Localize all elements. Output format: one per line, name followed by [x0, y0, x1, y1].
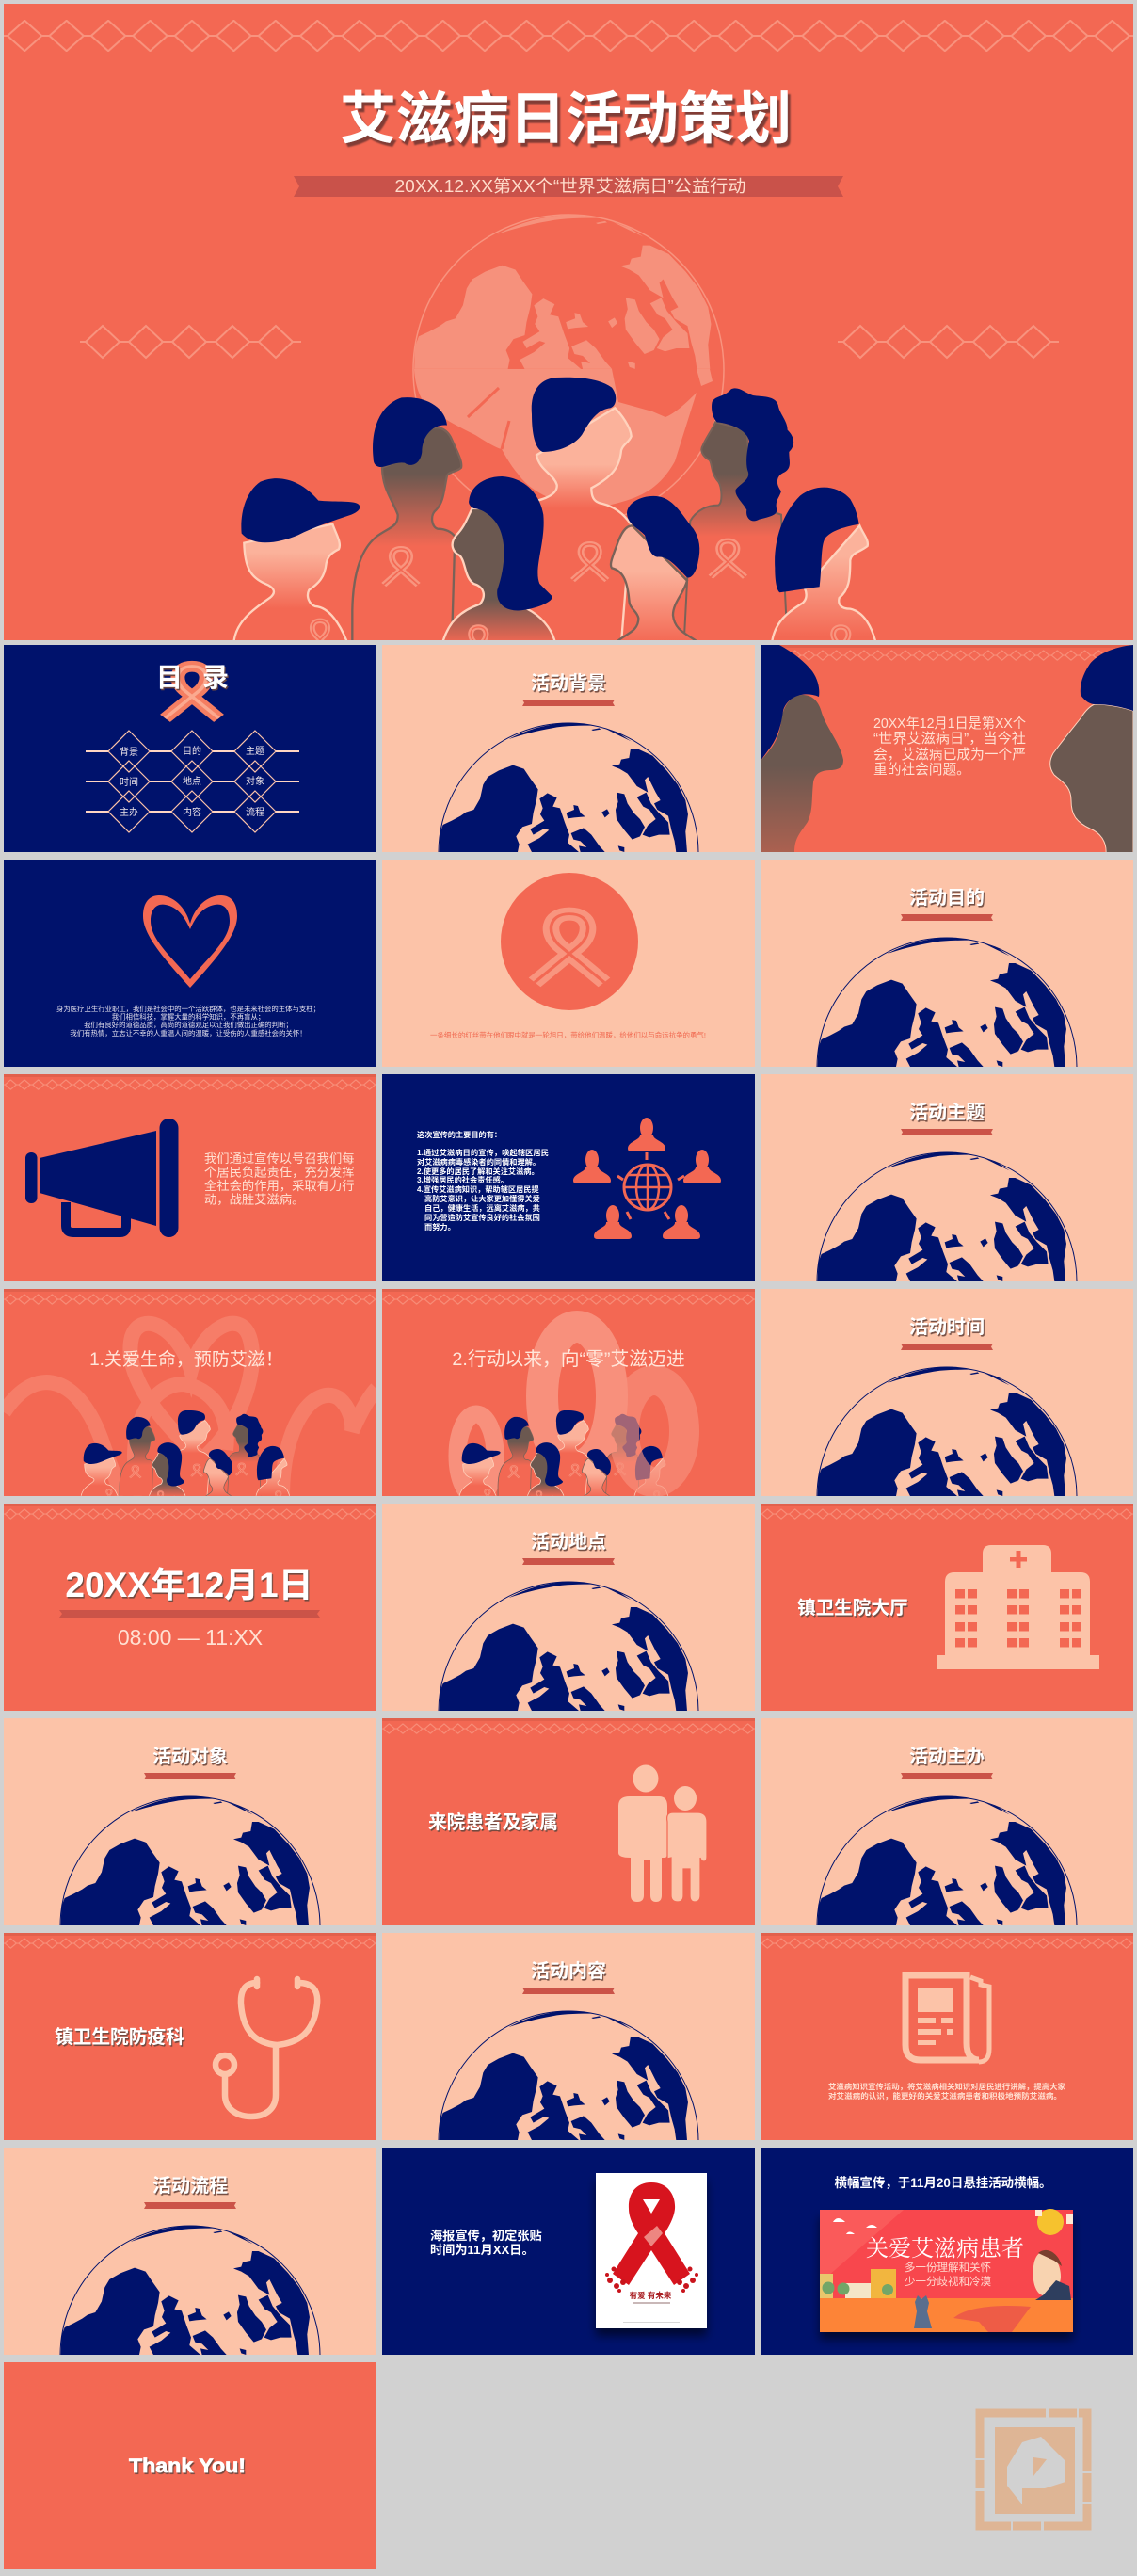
date heading: 20XX年12月1日 [65, 1566, 313, 1604]
panel: ribbon message [382, 860, 755, 1067]
heading bar [522, 1988, 615, 1994]
text block: 全社会的作用，采取有力行 [204, 1178, 355, 1193]
banner text: 横幅宣传，于11月20日悬挂活动横幅。 [834, 2175, 1052, 2190]
contents diamond grid: 主办 [120, 806, 138, 818]
heading: 活动主办 [909, 1746, 985, 1767]
heading text: 2.行动以来，向“零”艾滋迈进 [452, 1349, 685, 1370]
panel: activity background title [382, 645, 755, 852]
contents diamond grid [86, 731, 299, 832]
banner image [820, 2209, 1073, 2332]
watermark stamp [980, 2413, 1087, 2526]
text block: 3.增强居民的社会责任感。 [417, 1175, 508, 1184]
panel: heart message [4, 860, 376, 1067]
contents diamond grid: 流程 [246, 806, 264, 818]
heading bar [522, 700, 615, 706]
icon: awareness ribbon [165, 667, 219, 718]
top diamond band [4, 20, 1133, 52]
title: 艾滋病日活动策划 [340, 88, 792, 151]
icon: hospital [937, 1545, 1099, 1669]
globe [439, 2011, 698, 2271]
underline bar [59, 1610, 320, 1618]
icon: global network [573, 1118, 721, 1239]
globe [439, 723, 698, 983]
text block: 会，艾滋病已成为一个严 [873, 747, 1026, 763]
text block [204, 1151, 355, 1207]
text block: 1.通过艾滋病日的宣传，唤起辖区居民 [417, 1148, 549, 1157]
diamond band [4, 1294, 376, 1305]
text block: 动，战胜艾滋病。 [204, 1192, 304, 1207]
right diamond ornament [838, 326, 1059, 358]
panel: activity location title [382, 1504, 755, 1711]
poster image: 有爱 有未来 [630, 2291, 672, 2300]
globe illustration [413, 215, 724, 525]
poster image [596, 2173, 707, 2328]
heading: 活动地点 [531, 1531, 606, 1553]
heading: 活动对象 [152, 1745, 228, 1767]
contents diamond grid: 时间 [120, 776, 138, 788]
text block: 我们通过宣传以号召我们每 [204, 1151, 355, 1166]
people illustration [81, 1410, 290, 1502]
contents diamond grid: 主题 [246, 746, 264, 757]
text block [56, 1005, 320, 1038]
contents diamond grid: 对象 [246, 775, 264, 787]
closing text: Thank You! [129, 2455, 246, 2477]
text block [417, 1130, 549, 1232]
icon: stethoscope [216, 1979, 317, 2117]
poster text: 海报宣传，初定张贴 [430, 2228, 542, 2243]
text block: 自己，健康生活，远离艾滋病，共 [424, 1203, 540, 1213]
panel: poster publicity [382, 2148, 755, 2355]
heading bar [522, 1558, 615, 1565]
heading: 目 [156, 663, 183, 692]
panel: hospital location [761, 1504, 1133, 1711]
heading text: 1.关爱生命，预防艾滋！ [89, 1349, 283, 1370]
diamond band [382, 1294, 755, 1305]
text block: 同为营造防艾宣传良好的社会氛围 [424, 1213, 540, 1222]
contents diamond grid: 背景 [120, 746, 138, 758]
globe [817, 1367, 1077, 1627]
overlay zero [624, 1380, 684, 1482]
globe [817, 938, 1077, 1198]
people illustration [459, 1410, 668, 1502]
heading bar [901, 914, 993, 921]
text block: 身为医疗卫生行业职工，我们是社会中的一个活跃群体，也是未来社会的主体与支柱； [56, 1005, 320, 1013]
group of people illustration [233, 378, 876, 660]
location text: 镇卫生院大厅 [797, 1597, 908, 1618]
panel: activity audience title [4, 1718, 376, 1925]
diamond band [4, 1508, 376, 1520]
panel: activity time title [761, 1289, 1133, 1496]
panel: theme one [4, 1289, 376, 1496]
ground decoration [953, 2306, 1031, 2332]
panel: banner publicity [761, 2148, 1133, 2355]
panel: activity theme title [761, 1074, 1133, 1281]
cartoon cat [914, 2295, 932, 2328]
text block: “世界艾滋病日”，当今社 [873, 731, 1026, 747]
panel: theme two [382, 1289, 755, 1496]
panel: activity content title [382, 1933, 755, 2140]
organiser text: 镇卫生院防疫科 [55, 2026, 184, 2048]
text block: 对艾滋病的认识，能更好的关爱艾滋病患者和积极地预防艾滋病。 [828, 2091, 1062, 2101]
right face [1050, 645, 1133, 854]
audience text: 来院患者及家属 [428, 1811, 558, 1833]
diamond band [761, 1508, 1133, 1520]
text block: 20XX年12月1日是第XX个 [873, 715, 1026, 732]
text block: 4.宣传艾滋病知识，帮助辖区居民提 [417, 1184, 539, 1194]
panel: publicity goals [382, 1074, 755, 1281]
banner image: 关爱艾滋病患者 [866, 2236, 1024, 2262]
globe [439, 1582, 698, 1842]
panel: activity purpose title [761, 860, 1133, 1067]
contents diamond grid: 目的 [183, 745, 201, 757]
globe [60, 2226, 320, 2486]
text block: 我们有热情，立志让不幸的人重温人间的温暖，让受伤的人重感社会的关怀！ [70, 1029, 307, 1038]
panel: faces with background text [761, 645, 1133, 852]
diamond band [761, 650, 1133, 661]
text block: 这次宣传的主要目的有： [417, 1130, 502, 1139]
heading: 录 [202, 663, 229, 692]
heading bar [901, 1773, 993, 1779]
text block: 我们有良好的道德品质，高尚的道德观足以让我们做出正确的判断； [84, 1021, 293, 1029]
poster text [430, 2228, 542, 2257]
heading: 活动背景 [531, 672, 606, 694]
panel: cover slide [4, 4, 1133, 640]
heading bar [144, 2202, 236, 2209]
heading: 活动流程 [152, 2175, 228, 2197]
text block: 2.使更多的居民了解和关注艾滋病。 [417, 1167, 539, 1176]
text block [828, 2082, 1065, 2101]
text line: 一条细长的红丝带在他们眼中就是一轮旭日，带给他们温暖，给他们以与命运抗争的勇气! [430, 1031, 706, 1039]
time: 08:00 — 11:XX [118, 1625, 263, 1650]
background zeros [457, 1327, 612, 1497]
panel: table of contents [4, 645, 376, 852]
panel: activity organiser title [761, 1718, 1133, 1925]
panel: activity process title [4, 2148, 376, 2355]
diamond band [4, 1079, 376, 1090]
left diamond ornament [80, 326, 301, 358]
heading: 活动时间 [909, 1316, 985, 1338]
icon: megaphone [25, 1119, 179, 1237]
left face [761, 645, 843, 852]
panel: date [4, 1504, 376, 1711]
icon: newspaper [905, 1975, 989, 2062]
panel: organiser [4, 1933, 376, 2140]
text block: 个居民负起责任，充分发挥 [204, 1166, 355, 1179]
banner image: 少一分歧视和冷漠 [905, 2275, 991, 2288]
panel: knowledge publicity [761, 1933, 1133, 2140]
background hearts [4, 1324, 376, 1496]
text block: 艾滋病知识宣传活动，将艾滋病相关知识对居民进行讲解，提高大家 [828, 2082, 1065, 2091]
poster text: 时间为11月XX日。 [430, 2242, 535, 2257]
cartoon man [1033, 2250, 1071, 2300]
subtitle ribbon [294, 176, 843, 197]
heading: 活动内容 [531, 1959, 606, 1982]
heading bar [901, 1344, 993, 1350]
panel: patients and family [382, 1718, 755, 1925]
text block: 而努力。 [424, 1222, 456, 1232]
heading [156, 663, 229, 692]
panel: megaphone [4, 1074, 376, 1281]
contents diamond grid: 内容 [183, 806, 201, 818]
globe [60, 1796, 320, 2056]
contents diamond grid: 地点 [183, 775, 201, 787]
text block: 对艾滋病病毒感染者的同情和理解。 [417, 1157, 540, 1167]
globe [817, 1796, 1077, 2056]
heading: 活动目的 [909, 887, 985, 909]
diamond band [4, 1938, 376, 1949]
text block: 高防艾意识，让大家更加懂得关爱 [424, 1194, 540, 1203]
diamond band [761, 1938, 1133, 1949]
heading bar [144, 1773, 236, 1779]
icon: adult and child [618, 1764, 707, 1902]
icon: heart [143, 895, 237, 988]
panel: thank you [4, 2362, 376, 2569]
banner image: 多一份理解和关怀 [905, 2261, 991, 2274]
text block: 我们相信科技，掌握大量的科学知识，不再盲从； [112, 1013, 264, 1021]
heading bar [901, 1129, 993, 1135]
text block [873, 715, 1026, 778]
diamond band [382, 1723, 755, 1734]
icon: ribbon in circle [501, 873, 638, 1010]
globe [817, 1152, 1077, 1412]
text block: 重的社会问题。 [873, 762, 970, 778]
subtitle ribbon: 20XX.12.XX第XX个“世界艾滋病日”公益行动 [395, 177, 745, 196]
heading: 活动主题 [909, 1102, 985, 1123]
